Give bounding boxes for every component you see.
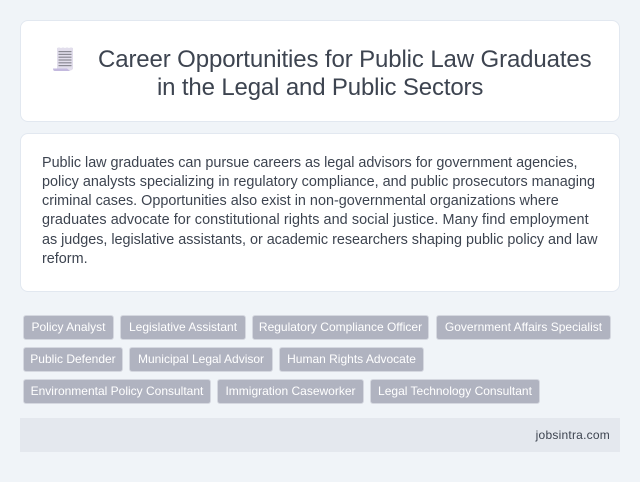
tag (23, 347, 123, 372)
tag (23, 379, 211, 404)
text block: description: reform. (42, 251, 88, 267)
tag: Human Rights Advocate (287, 352, 416, 366)
tag: Policy Analyst (31, 320, 106, 334)
panel: header (20, 20, 620, 122)
tag (120, 315, 246, 340)
text block: description: Public law graduates can pursue careers as legal advisors for government agencies, (42, 155, 578, 171)
text block: description (42, 155, 598, 267)
panel: description (20, 133, 620, 292)
tag: Immigration Caseworker (225, 384, 356, 398)
tag: Environmental Policy Consultant (31, 384, 203, 398)
footer credit: jobsintra.com (536, 428, 610, 442)
icon: document scroll (53, 48, 73, 71)
tag: Municipal Legal Advisor (138, 352, 264, 366)
text block: description: graduates advocate for constitutional rights and social justice. Many find employment (42, 212, 589, 228)
text block: description: criminal cases. Opportunities also exist in non-governmental organizations where (42, 193, 559, 209)
tag (436, 315, 611, 340)
footer (20, 418, 620, 452)
tag (217, 379, 364, 404)
title: in the Legal and Public Sectors (157, 74, 483, 101)
tag (23, 315, 114, 340)
tag (252, 315, 429, 340)
text block: description: policy analysts specializing in regulatory compliance, and public prosecutors managing (42, 174, 595, 190)
tag: Regulatory Compliance Officer (259, 320, 422, 334)
title (98, 46, 592, 101)
tag: Public Defender (30, 352, 116, 366)
tags: career roles (23, 315, 611, 404)
tag (279, 347, 424, 372)
title: Career Opportunities for Public Law Graduates (98, 46, 592, 73)
tag: Government Affairs Specialist (445, 320, 602, 334)
tag (129, 347, 273, 372)
tag (370, 379, 540, 404)
tag: Legal Technology Consultant (378, 384, 532, 398)
text block: description: as judges, legislative assistants, or academic researchers shaping public policy and law (42, 232, 598, 248)
tag: Legislative Assistant (129, 320, 237, 334)
